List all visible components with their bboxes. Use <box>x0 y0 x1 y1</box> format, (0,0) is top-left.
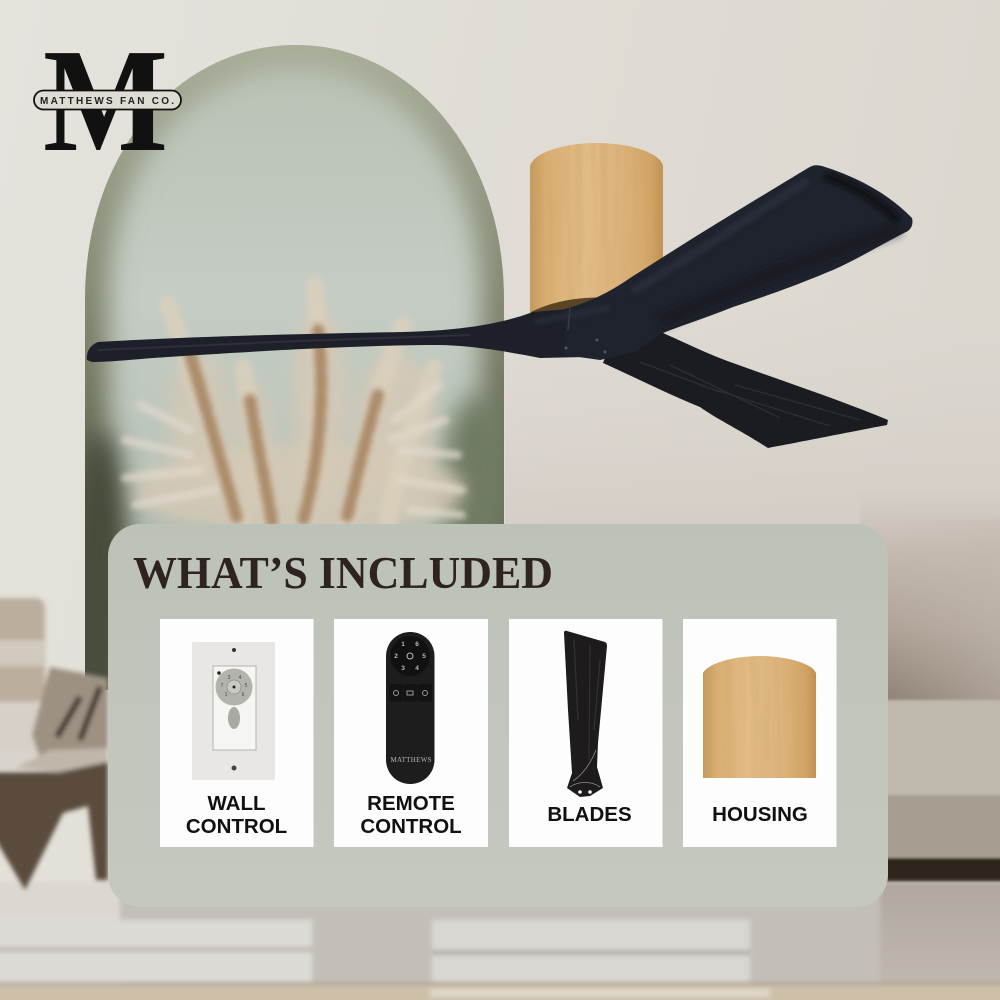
label: blades: BLADES <box>547 803 632 826</box>
icon: blade <box>564 631 607 797</box>
icon: remote: 4 <box>415 665 419 672</box>
icon: wall plate: 5 <box>245 683 248 689</box>
blade: left long <box>87 308 585 362</box>
label: housing: HOUSING <box>712 803 808 826</box>
card: housing <box>683 619 836 847</box>
label: remote control: REMOTE <box>367 792 455 815</box>
label: wall control: CONTROL <box>186 815 287 838</box>
icon: remote: 3 <box>401 665 405 672</box>
logo: Matthews Fan Co.: M <box>43 19 168 183</box>
background: left sofa and throw <box>0 598 108 890</box>
label: wall control: WALL <box>207 792 266 815</box>
icon: wall plate: 1 <box>225 692 228 698</box>
icon: wall plate: 7 <box>221 683 224 689</box>
icon: remote: MATTHEWS <box>390 756 432 764</box>
icon: remote: 1 <box>401 641 405 648</box>
label: remote control: CONTROL <box>360 815 462 838</box>
icon: wall plate <box>192 642 275 780</box>
card: blades <box>509 619 662 847</box>
fan hub <box>535 307 610 354</box>
icon: wall plate: 6 <box>242 692 245 698</box>
icon: wood housing <box>703 656 816 778</box>
blade: lower right <box>603 333 888 448</box>
background: green arched niche <box>72 40 514 700</box>
logo badge: MATTHEWS FAN CO. <box>40 96 174 107</box>
card: wall control <box>160 619 314 847</box>
panel: what's included <box>108 524 888 907</box>
icon: remote: 5 <box>422 653 426 660</box>
heading: WHAT’S INCLUDED <box>133 547 553 598</box>
fan: three black wood blades <box>87 165 912 448</box>
card: remote control <box>334 619 488 847</box>
icon: wall plate: 3 <box>228 675 231 681</box>
background: right sofa <box>860 490 1000 882</box>
fan: wood housing <box>530 143 664 325</box>
icon: remote <box>386 632 434 784</box>
blade: upper right <box>565 165 912 360</box>
logo badge <box>34 90 181 110</box>
background: floor <box>0 882 1000 1000</box>
icon: remote: 6 <box>415 641 419 648</box>
icon: wall plate: 4 <box>239 675 242 681</box>
icon: remote: 2 <box>394 653 398 660</box>
decor: pampas grass <box>125 285 465 535</box>
